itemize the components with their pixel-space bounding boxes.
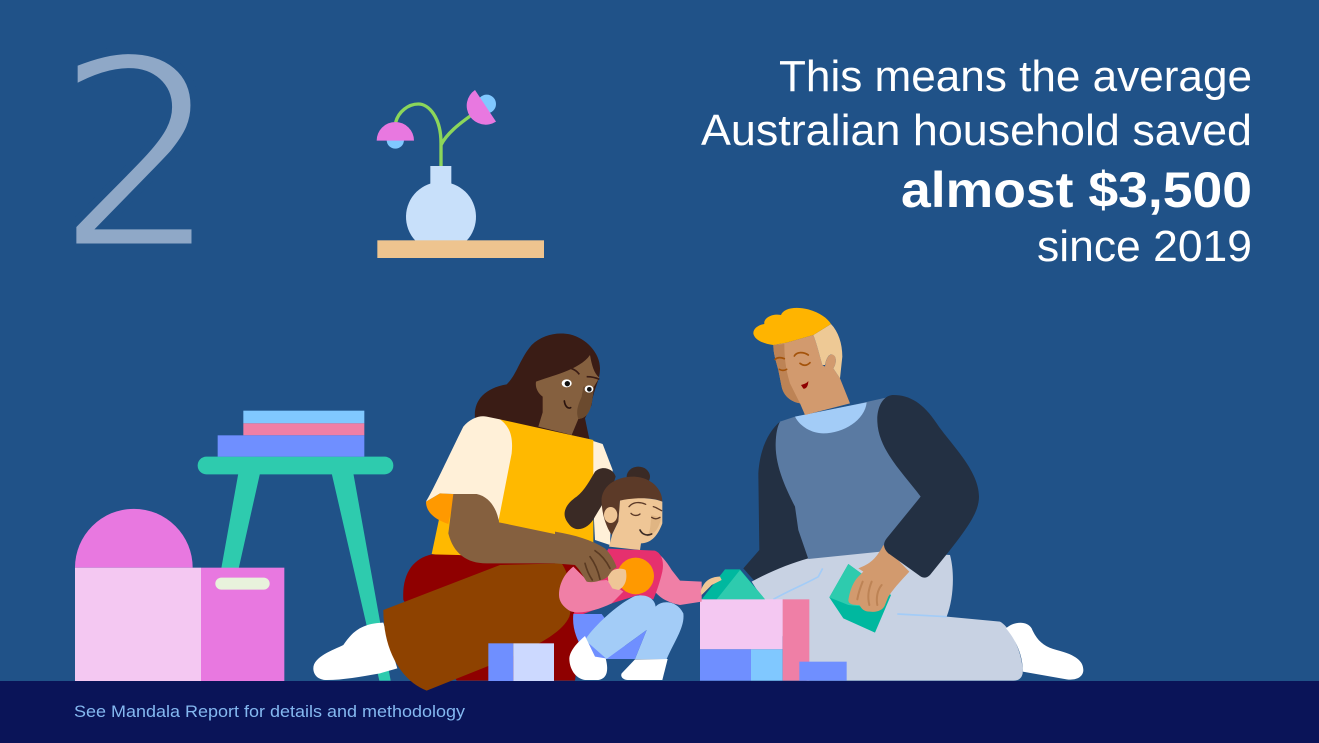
front toy blocks	[488, 643, 554, 681]
large number 2: 2	[53, 0, 222, 310]
headline text: since 2019	[1037, 222, 1252, 271]
footer bar	[0, 681, 1319, 743]
headline text: almost $3,500	[901, 162, 1252, 218]
footer note: See Mandala Report for details and methodology	[74, 702, 466, 721]
vase with flowers on shelf	[377, 90, 544, 258]
figure: girl	[555, 467, 722, 680]
table, books and storage box	[75, 411, 393, 681]
man's right sleeve	[877, 395, 979, 578]
headline text: This means the average	[779, 52, 1252, 101]
figure: man	[743, 308, 1083, 681]
man's head	[753, 308, 850, 415]
held toy block and hand	[829, 545, 909, 633]
headline text: Australian household saved	[701, 106, 1252, 155]
figure: woman	[313, 333, 613, 691]
woman's hand on girl	[555, 532, 617, 582]
headline text	[701, 52, 1252, 271]
toy pyramid and stacked blocks	[700, 569, 847, 681]
